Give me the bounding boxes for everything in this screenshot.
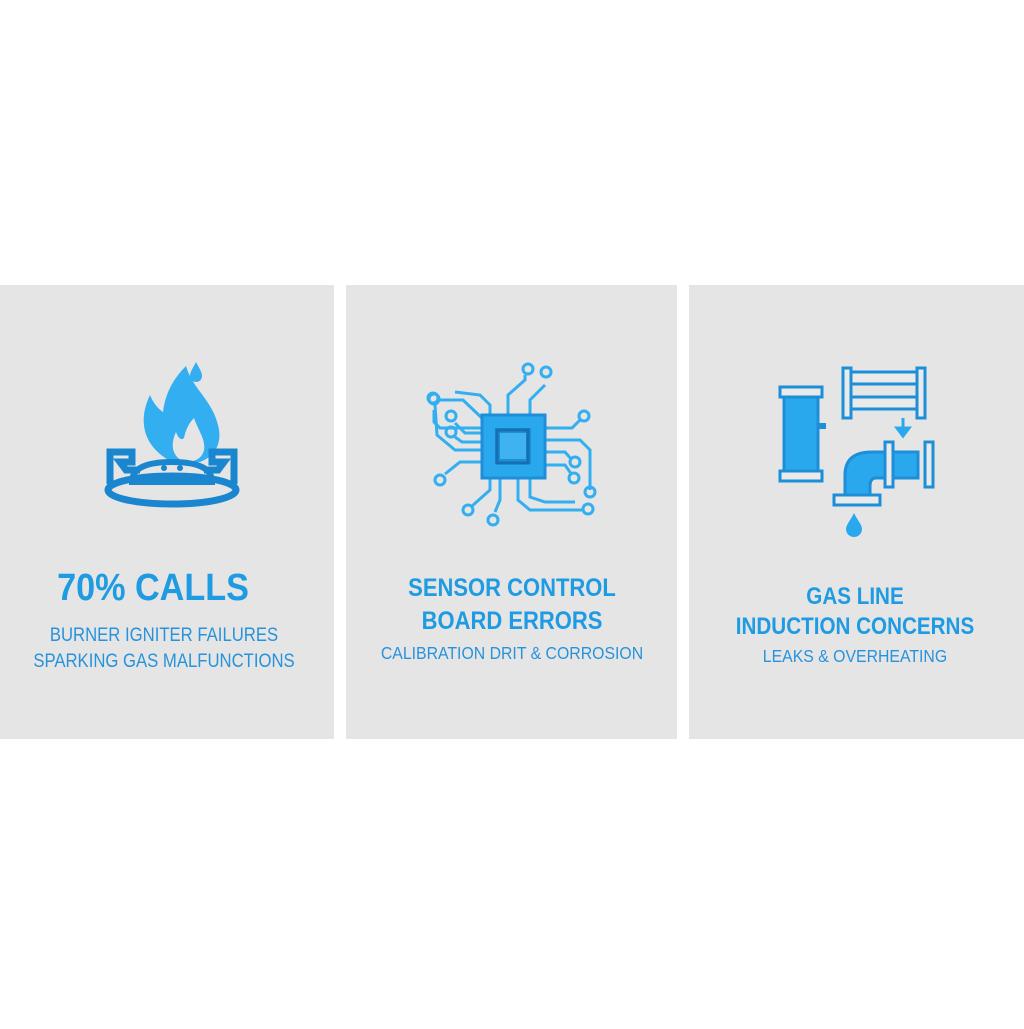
icon: circuit chip — [428, 364, 595, 525]
panel: burner — [0, 285, 334, 739]
headline: gas line: GAS LINE — [806, 583, 904, 609]
headline: gas line — [736, 583, 974, 639]
text: burner subtitle — [33, 624, 295, 671]
headline: sensor — [408, 574, 616, 634]
text: sensor subtitle: CALIBRATION DRIT & CORROSION — [381, 643, 643, 663]
panel: gas line — [689, 285, 1024, 739]
panel: sensor — [346, 285, 677, 739]
headline: 70% calls: 70% CALLS — [57, 565, 249, 608]
text: burner subtitle: SPARKING GAS MALFUNCTIONS — [33, 650, 295, 671]
text: burner subtitle: BURNER IGNITER FAILURES — [50, 624, 278, 645]
headline: gas line: INDUCTION CONCERNS — [736, 613, 974, 639]
headline: sensor: BOARD ERRORS — [422, 607, 602, 634]
icon: burner flame — [108, 362, 236, 504]
headline: sensor: SENSOR CONTROL — [408, 574, 616, 601]
icon: pipes — [780, 368, 933, 537]
text: gas line subtitle: LEAKS & OVERHEATING — [763, 646, 947, 666]
